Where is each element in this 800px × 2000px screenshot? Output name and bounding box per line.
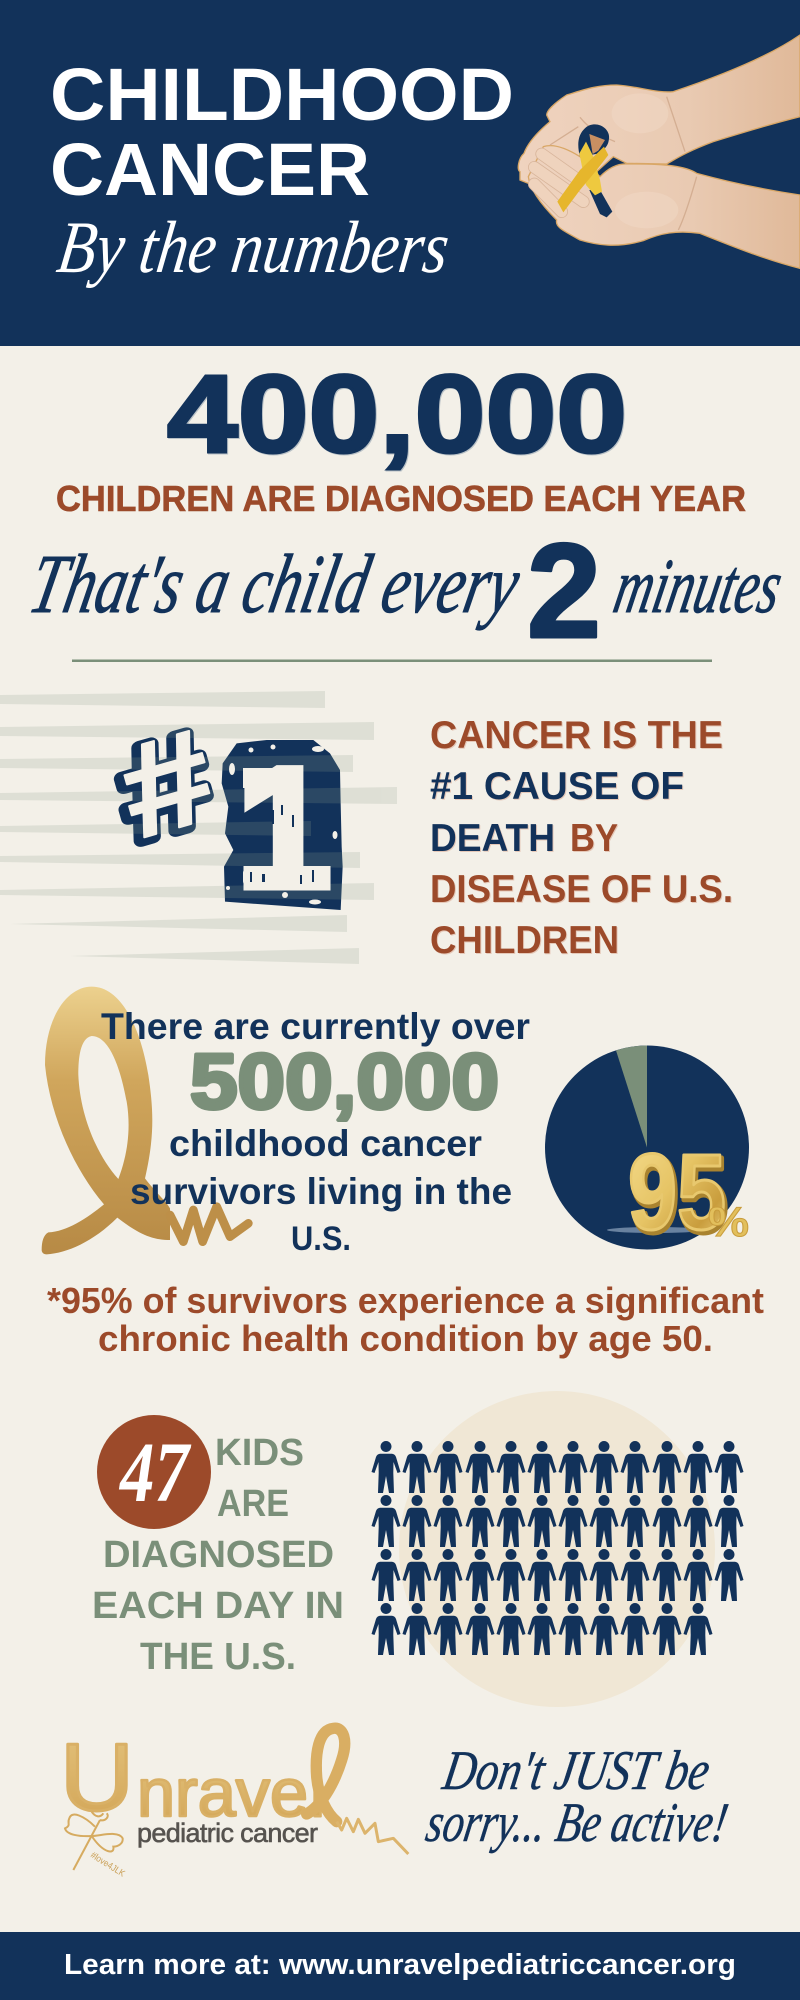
badge: 47: 47 <box>118 1424 191 1520</box>
text block: survivors: survivors living in the <box>130 1171 512 1212</box>
text block: survivors <box>101 1006 530 1258</box>
number block and hash outline <box>100 704 343 910</box>
text block: survivors: childhood cancer <box>169 1123 482 1164</box>
hash and numeral fill: 1 <box>236 732 332 924</box>
footer <box>0 1932 800 2000</box>
badge: 47 <box>97 1415 211 1529</box>
statistic: 500,000: 500,000 <box>190 1037 499 1125</box>
text block: kids diagnosed: THE U.S. <box>140 1636 296 1678</box>
title: Childhood Cancer: CHILDHOOD <box>50 53 514 136</box>
script line: a child every 2 minutes <box>22 517 790 666</box>
text block: survivors: There are currently over <box>101 1006 530 1047</box>
footnote: chronic health condition: *95% of survivors experience a significant <box>47 1280 764 1321</box>
script line: a child every 2 minutes: That's a child every <box>22 538 528 631</box>
script slogan: be active <box>422 1740 733 1854</box>
script line: a child every 2 minutes: 2 <box>527 517 601 666</box>
icon: gold ribbon <box>42 987 248 1254</box>
label: 95%: 95 <box>630 1134 728 1255</box>
panel: header <box>0 0 800 346</box>
logo: Unravel pediatric cancer <box>60 1724 408 1879</box>
text block: #1 cause of death: #1 CAUSE OF <box>430 765 684 808</box>
beige circle <box>399 1391 715 1707</box>
graphic: #1 with stripes <box>0 691 397 964</box>
logo: Unravel pediatric cancer: l <box>310 1755 325 1831</box>
footnote: chronic health condition: chronic health condition by age 50. <box>98 1318 713 1359</box>
subtitle: By the numbers: By the numbers <box>53 207 454 289</box>
logo: Unravel pediatric cancer: pediatric cancer <box>137 1818 318 1848</box>
hash and numeral fill <box>103 701 338 924</box>
text block: kids diagnosed: ARE <box>217 1483 289 1525</box>
text block: #1 cause of death: DEATH <box>430 817 555 860</box>
statistic: 400,000: 400,000 <box>167 353 627 476</box>
script slogan: be active: Don't JUST be <box>438 1740 715 1802</box>
text block: #1 cause of death: DISEASE OF U.S. <box>430 868 733 911</box>
text block: #1 cause of death: BY <box>570 817 618 860</box>
label: 95%: % <box>708 1198 749 1245</box>
chart: 95 percent pie <box>545 1046 749 1255</box>
text block: #1 cause of death: CHILDREN <box>430 919 619 962</box>
stripes <box>0 691 397 964</box>
text block: #1 cause of death: CANCER IS THE <box>430 714 723 757</box>
image: hands holding ribbon <box>518 35 800 268</box>
logo: Unravel pediatric cancer: U <box>60 1724 134 1831</box>
text block: kids diagnosed: KIDS <box>215 1432 304 1474</box>
hash and numeral fill: # <box>103 701 230 867</box>
number block and hash outline: # <box>100 704 227 870</box>
pictogram: 47 children <box>372 1441 744 1655</box>
text block: #1 cause of death <box>430 714 733 962</box>
footnote: chronic health condition <box>47 1280 764 1359</box>
subheading: children diagnosed: CHILDREN ARE DIAGNOSED EACH YEAR <box>56 478 746 519</box>
footer: Learn more at: www.unravelpediatriccancer.org <box>64 1949 736 1981</box>
label: 95%: 95 <box>628 1131 726 1252</box>
title: Childhood Cancer <box>50 53 514 211</box>
logo: Unravel pediatric cancer: #love4JLK <box>89 1850 127 1879</box>
logo: Unravel pediatric cancer: nrave <box>137 1755 308 1831</box>
text block: kids diagnosed <box>92 1432 344 1678</box>
text block: survivors: U.S. <box>291 1220 351 1258</box>
title: Childhood Cancer: CANCER <box>50 128 370 211</box>
text block: kids diagnosed: DIAGNOSED <box>103 1534 334 1576</box>
text block: kids diagnosed: EACH DAY IN <box>92 1585 344 1627</box>
